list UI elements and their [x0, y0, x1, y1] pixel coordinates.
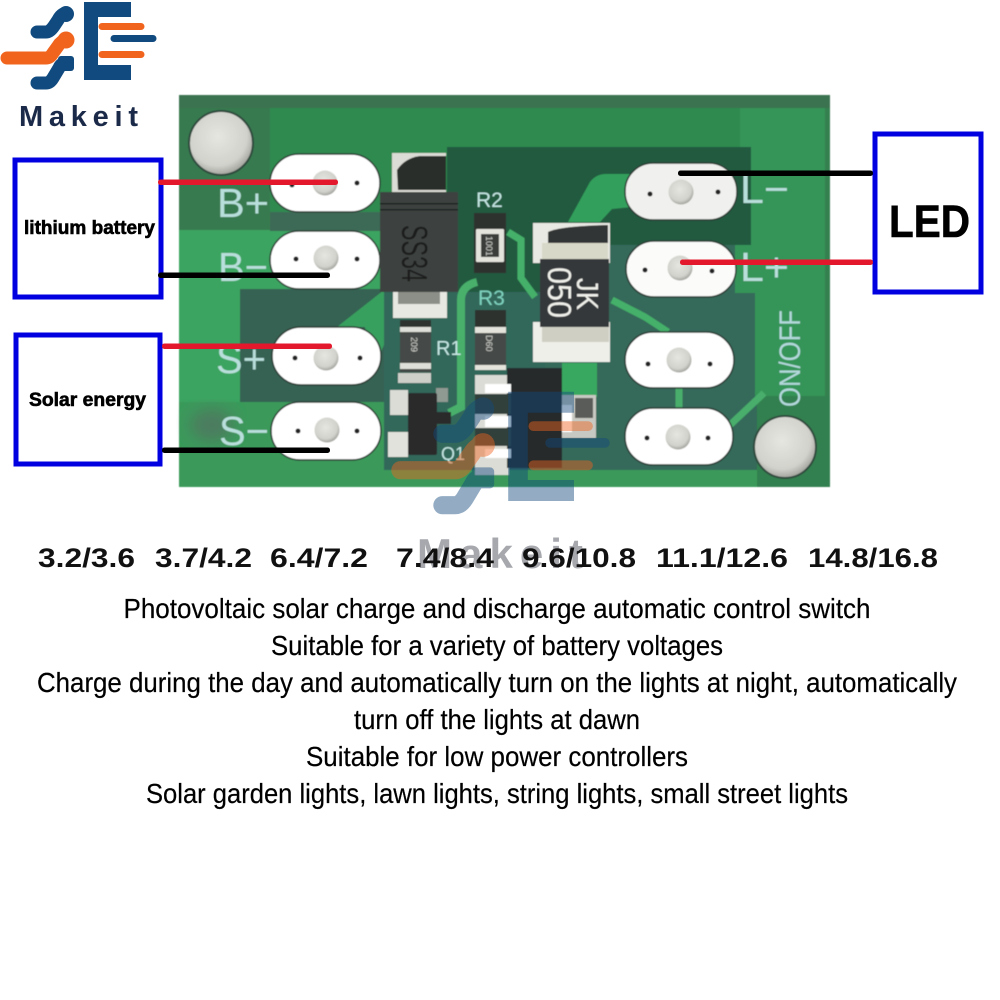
- box: solar energy: [16, 335, 160, 464]
- circuit board photo: [179, 95, 830, 487]
- shunt marking value: 050: [541, 267, 578, 318]
- trace from pad to on off margin: [730, 393, 764, 425]
- mounting hole bottom right: [754, 416, 816, 478]
- LED label: LED: [889, 196, 970, 247]
- pad: S+: [272, 327, 381, 385]
- upper green plane: [270, 108, 825, 230]
- silkscreen S+: S+: [216, 336, 266, 382]
- resistor R2: [474, 213, 506, 273]
- bright trace plane to L-: [568, 174, 632, 222]
- shunt body: [540, 259, 609, 327]
- shaded patch near S-: [190, 409, 234, 441]
- description text: [37, 593, 957, 809]
- upper left solder mask: [179, 108, 270, 230]
- wire: battery positive: [158, 180, 338, 185]
- bottom right corner: [757, 396, 830, 487]
- voltage options: 7.4/8.4: [396, 543, 494, 573]
- voltage options: 3.7/4.2: [155, 543, 252, 573]
- wire: battery negative: [158, 272, 330, 278]
- lower strip: [384, 470, 830, 487]
- solar energy label: Solar energy: [29, 390, 146, 411]
- top edge strip: [179, 95, 830, 108]
- right dark plane: [545, 245, 764, 470]
- logo letter E: [84, 2, 131, 80]
- trace from R2 to JK050: [508, 232, 535, 297]
- trace from JK050 to pad: [612, 300, 668, 332]
- silkscreen L+: L+: [740, 244, 789, 290]
- lithium battery label: lithium battery: [24, 218, 155, 239]
- silkscreen S-: S−: [219, 408, 269, 454]
- logo circuit traces: [37, 13, 66, 32]
- top right dark plane: [447, 147, 751, 292]
- mounting hole top left: [189, 111, 253, 175]
- bottom green plane: [179, 402, 479, 487]
- pad: L+: [626, 241, 736, 297]
- diode SS34: [380, 153, 458, 318]
- description text: turn off the lights at dawn: [354, 704, 640, 735]
- shunt marking JK: JK: [570, 278, 605, 310]
- watermark brand name: Makeit: [417, 530, 583, 577]
- resistor R3: [475, 310, 506, 370]
- R1 marking: 209: [409, 337, 419, 352]
- transistor Q1: [388, 388, 451, 457]
- label Q1: Q1: [441, 444, 465, 464]
- label R3: R3: [478, 287, 505, 310]
- voltage options: 14.8/16.8: [808, 543, 938, 573]
- R2 marking: 1001: [484, 236, 494, 256]
- pad: L-: [625, 163, 737, 220]
- silkscreen B-: B−: [218, 244, 268, 290]
- R3 marking: D60: [484, 335, 494, 352]
- wire: LED positive: [680, 260, 873, 265]
- lower left bright plane: [179, 230, 389, 402]
- regulator chip: [475, 368, 596, 475]
- silkscreen L-: L−: [740, 166, 789, 212]
- wire: solar negative: [162, 448, 330, 453]
- logo brand name: Makeit: [19, 101, 138, 133]
- description text: Suitable for a variety of battery voltages: [271, 630, 723, 661]
- diode bottom pad: [393, 290, 447, 318]
- diode marking: SS34: [394, 225, 435, 282]
- logo: [7, 2, 153, 133]
- watermark logo: [400, 392, 605, 505]
- silkscreen B+: B+: [217, 180, 269, 226]
- box: LED: [875, 134, 981, 292]
- label R2: R2: [476, 189, 503, 212]
- label R1: R1: [436, 338, 462, 360]
- board substrate: [179, 95, 830, 487]
- voltage options: [38, 543, 938, 573]
- voltage options: 3.2/3.6: [38, 543, 135, 573]
- pad: switch bottom: [625, 408, 733, 465]
- regulator trace: [562, 363, 597, 397]
- pad: B-: [270, 231, 380, 289]
- voltage options: 6.4/7.2: [270, 543, 368, 573]
- box: lithium battery: [15, 160, 161, 297]
- shunt JK050: [533, 223, 610, 362]
- wire: LED negative: [678, 170, 873, 176]
- dark plane left center: [240, 289, 384, 402]
- centre dark plane: [384, 292, 554, 470]
- right green margin: [735, 108, 825, 396]
- description text: Suitable for low power controllers: [306, 741, 688, 772]
- chip left leads: [485, 384, 511, 393]
- pad: B+: [270, 154, 380, 212]
- pad holes and drill dots: [290, 170, 720, 450]
- diode top pad: [392, 153, 446, 195]
- trace from R3 area to Q1: [449, 282, 477, 413]
- description text: Photovoltaic solar charge and discharge automatic control switch: [124, 593, 870, 624]
- bright triangle by S+: [337, 290, 384, 372]
- shunt bottom terminal: [533, 322, 610, 362]
- voltage options: 9.6/10.8: [522, 543, 636, 573]
- resistor R1: [398, 320, 431, 383]
- pad: S-: [271, 402, 381, 460]
- shunt top terminal: [533, 223, 610, 263]
- chip right tab: [562, 395, 596, 438]
- diode body: [380, 192, 458, 292]
- trace between bottom right pads: [676, 388, 682, 408]
- band below B+: [270, 212, 385, 231]
- voltage options: 11.1/12.6: [656, 543, 788, 573]
- description text: Solar garden lights, lawn lights, string lights, small street lights: [146, 778, 848, 809]
- pad: switch top: [625, 332, 734, 388]
- silkscreen ON/OFF: ON/OFF: [774, 310, 807, 407]
- logo bars: [102, 26, 141, 54]
- wire: solar positive: [162, 344, 332, 349]
